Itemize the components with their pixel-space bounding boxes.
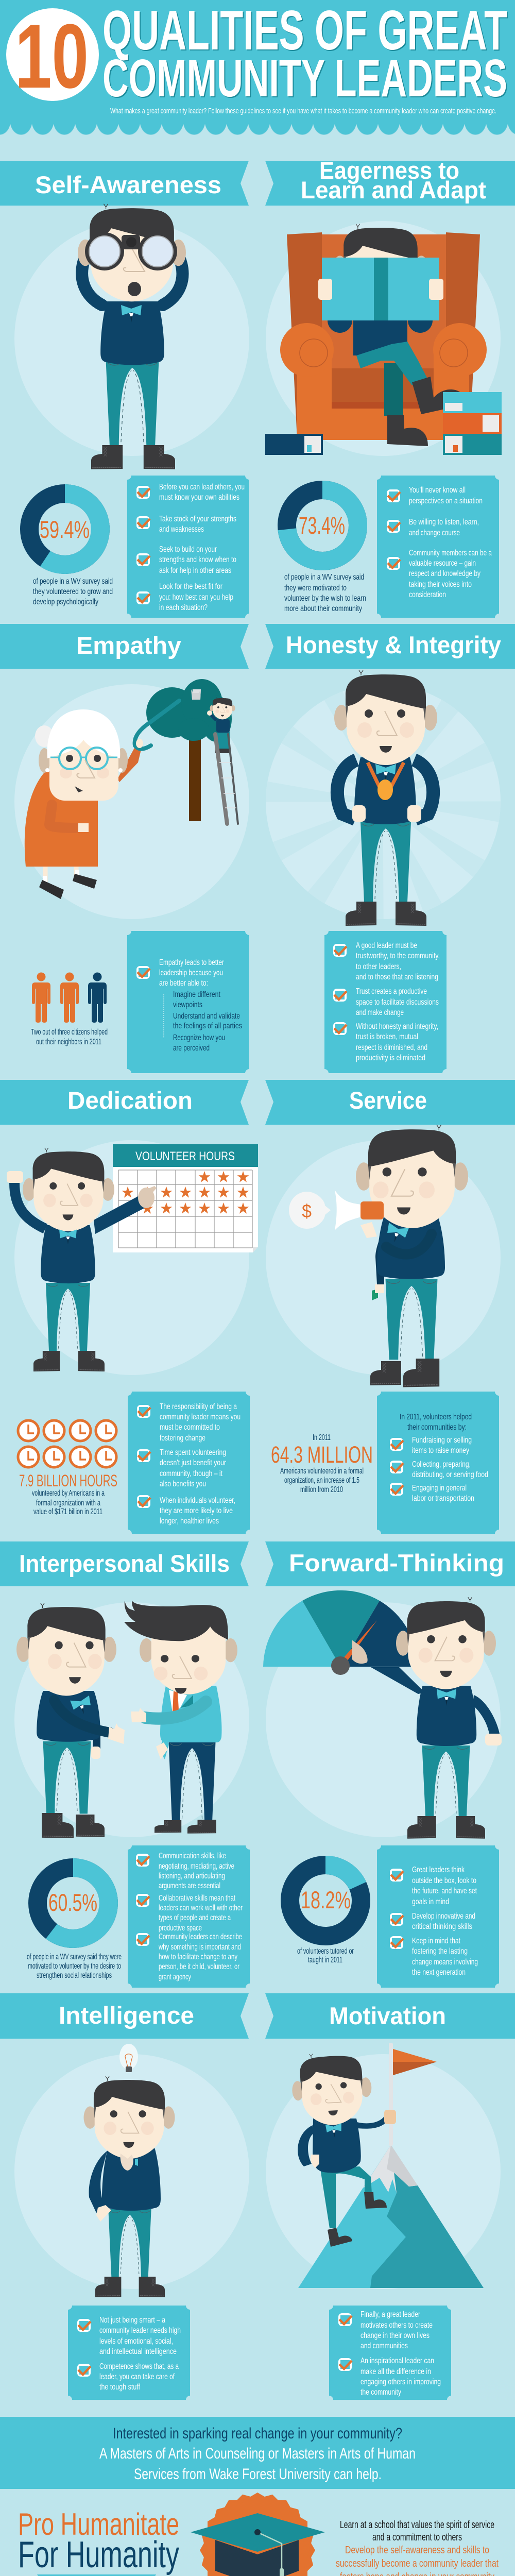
gauge with man pointing — [263, 1590, 502, 1839]
panel: intelligence checklist: the tough stuff — [99, 2383, 140, 2392]
panel: self-awareness checklist: Seek to build on your — [159, 545, 217, 554]
motto: Pro Humanitate For Humanity: For Humanity — [18, 2534, 179, 2575]
stat: 18.2% donut: of volunteers tutored or — [297, 1947, 354, 1956]
panel: honesty checklist: A good leader must be — [356, 941, 417, 950]
panel: interpersonal skills checklist: arguments are essential — [159, 1882, 220, 1890]
panel: honesty checklist: Trust creates a productive — [356, 987, 427, 996]
panel: empathy checklist: are better able to: — [159, 979, 208, 988]
backdrop circles — [14, 221, 501, 2289]
scalloped edge shadow — [0, 124, 515, 137]
panel: dedication checklist: fostering change — [160, 1434, 205, 1443]
panel: service checklist — [377, 1392, 499, 1534]
banner: Forward-Thinking: Forward-Thinking — [289, 1549, 504, 1577]
character: man reading in armchair — [265, 224, 502, 455]
call to action band — [0, 2417, 515, 2489]
call to action band: Services from Wake Forest University can help. — [134, 2466, 382, 2483]
stat: 73.4% donut: more about their community — [284, 604, 362, 613]
panel: empathy checklist: Understand and validate — [173, 1012, 240, 1021]
banner: Motivation: Motivation — [329, 2002, 446, 2029]
title — [102, 0, 507, 108]
panel: eagerness checklist: consideration — [409, 590, 446, 599]
scalloped edge — [0, 124, 515, 136]
panel: honesty checklist: trustworthy, to the community, — [356, 952, 440, 960]
panel: service checklist: Fundraising or selling — [412, 1436, 472, 1445]
panel: intelligence checklist — [68, 2306, 190, 2400]
panel: eagerness checklist: respect and knowledge by — [409, 569, 480, 578]
panel: empathy checklist: are perceived — [173, 1044, 210, 1053]
panel: interpersonal skills checklist: types of people and create a — [159, 1913, 231, 1922]
panel: forward-thinking checklist — [377, 1845, 499, 1988]
panel: forward-thinking checklist: critical thinking skills — [412, 1922, 472, 1931]
panel: dedication checklist: community, though – it — [160, 1469, 222, 1478]
panel: forward-thinking checklist: change means involving — [412, 1958, 478, 1967]
panel: intelligence checklist: and intellectual intelligence — [99, 2347, 177, 2356]
panel: eagerness checklist: taking their voices into — [409, 580, 472, 589]
panel: empathy checklist: leadership because you — [159, 969, 223, 977]
panel: interpersonal skills checklist: productive space — [159, 1924, 202, 1933]
panel: self-awareness checklist: must know your own abilities — [159, 493, 239, 502]
panel: eagerness checklist: perspectives on a situation — [409, 497, 483, 505]
panel: forward-thinking checklist: Develop innovative and — [412, 1912, 475, 1921]
banner: Intelligence: Intelligence — [59, 2002, 194, 2029]
panel: self-awareness checklist: you: how best can you help — [159, 593, 233, 602]
banner: Service — [265, 1080, 515, 1125]
panel: dedication checklist: doesn't just benefit your — [160, 1459, 227, 1467]
panel: service checklist: Engaging in general — [412, 1484, 467, 1493]
illustration: mountain with flag — [298, 2043, 484, 2288]
stat: 60.5% donut: 60.5% — [48, 1889, 97, 1916]
stat: 59.4% donut: develop psychologically — [33, 598, 98, 606]
panel: interpersonal skills checklist: listening, and articulating — [159, 1872, 225, 1880]
panel: motivation checklist: motivates others to create — [360, 2321, 433, 2330]
icon: graduation cap badge — [181, 2474, 334, 2576]
gauge: dial — [263, 1590, 412, 1675]
panel: eagerness checklist — [377, 476, 499, 618]
banner: Honesty & Integrity: Honesty & Integrity — [286, 631, 501, 658]
banner: Empathy — [0, 624, 249, 669]
panel: intelligence checklist: Competence shows that, as a — [99, 2362, 179, 2371]
panel: eagerness checklist: Be willing to listen, learn, — [409, 518, 479, 527]
panel: motivation checklist: engaging others in improving — [360, 2378, 441, 2386]
banner: Motivation — [265, 1993, 515, 2039]
character: man shaking hands, right — [124, 1601, 237, 1834]
text: school values — [336, 2519, 499, 2576]
panel: empathy checklist — [127, 931, 249, 1073]
stat: 18.2% donut — [290, 1865, 361, 1964]
panel: honesty checklist: respect is diminished, and — [356, 1043, 427, 1052]
character: man pointing at gauge — [352, 1597, 502, 1839]
panel: dedication checklist: community leader means you — [160, 1413, 241, 1421]
stat: 64.3 million: 64.3 MILLION — [271, 1442, 373, 1468]
panel: service checklist: their communities by: — [407, 1423, 467, 1432]
stat: 60.5% donut: motivated to volunteer by the desire to — [28, 1962, 121, 1971]
panel: forward-thinking checklist: fostering the lasting — [412, 1947, 468, 1956]
stat: 59.4% donut: 59.4% — [40, 516, 90, 543]
character: man with binoculars — [78, 204, 186, 469]
sunburst rays — [324, 743, 442, 860]
banner: Dedication — [0, 1080, 249, 1125]
header — [0, 0, 515, 137]
calendar: volunteer hours — [113, 1144, 258, 1252]
panel: motivation checklist: change in their own lives — [360, 2331, 430, 2340]
banner: Intelligence — [0, 1993, 249, 2039]
character: man with megaphone — [289, 1125, 468, 1387]
panel: honesty checklist — [324, 931, 447, 1073]
panel: motivation checklist: make all the difference in — [360, 2367, 431, 2376]
stat: 73.4% donut — [284, 490, 366, 613]
stat: 73.4% donut: 73.4% — [299, 512, 345, 539]
panel: motivation checklist — [329, 2306, 451, 2400]
panel: self-awareness checklist: Take stock of your strengths — [159, 515, 236, 523]
stat: 59.4% donut: of people in a WV survey said — [33, 577, 113, 586]
panel: honesty checklist: trust is broken, mutual — [356, 1032, 418, 1041]
banner: Dedication: Dedication — [67, 1087, 193, 1114]
stat: 73.4% donut: they were motivated to — [284, 584, 347, 592]
motto: Pro Humanitate For Humanity — [18, 2507, 179, 2576]
badge: number 10: 10 — [15, 5, 89, 107]
panel: motivation checklist: the community — [360, 2388, 401, 2397]
stat: two out of three citizens: out their neighbors in 2011 — [36, 1038, 101, 1046]
panel: honesty checklist: Without honesty and integrity, — [356, 1022, 438, 1031]
stat: 7.9 billion hours: 7.9 BILLION HOURS — [19, 1471, 117, 1490]
stat: 59.4% donut: they volunteered to grow and — [33, 587, 113, 596]
character: man shaking hands, left — [16, 1603, 125, 1838]
stat: 64.3 million — [271, 1433, 373, 1494]
panel: forward-thinking checklist: Great leaders think — [412, 1866, 465, 1874]
panel: dedication checklist: longer, healthier lives — [160, 1517, 219, 1526]
panel: self-awareness checklist: and weaknesses — [159, 525, 204, 534]
panel: interpersonal skills checklist: Collaborative skills mean that — [159, 1894, 235, 1903]
banner: Interpersonal Skills — [0, 1541, 249, 1586]
stat: 59.4% donut — [29, 494, 113, 606]
panel: service checklist: distributing, or serving food — [412, 1470, 488, 1479]
panel: dedication checklist — [128, 1392, 250, 1534]
banner: Forward-Thinking — [265, 1541, 515, 1586]
header band — [0, 0, 515, 124]
panel: dedication checklist: also benefits you — [160, 1480, 206, 1488]
panel: service checklist: items to raise money — [412, 1446, 469, 1455]
stat: 7.9 billion hours: value of $171 billion in 2011 — [33, 1507, 102, 1516]
stat: 60.5% donut: of people in a WV survey said they were — [27, 1953, 122, 1961]
banner: Honesty & Integrity — [265, 624, 515, 669]
banner: Eagerness to Learn and Adapt: Learn and Adapt — [301, 176, 486, 204]
panel: interpersonal skills checklist: grant agency — [159, 1973, 191, 1981]
panel: interpersonal skills checklist: Community leaders can describe — [159, 1933, 242, 1941]
panel: empathy checklist: viewpoints — [173, 1001, 202, 1009]
panel: honesty checklist: and to those that are listening — [356, 973, 438, 981]
panel: dedication checklist: they are more likely to live — [160, 1506, 233, 1515]
panel: motivation checklist: Finally, a great leader — [360, 2310, 421, 2319]
banner: Service: Service — [349, 1087, 427, 1114]
stat: 73.4% donut: volunteer by the wish to learn — [284, 594, 366, 603]
character: grandmother with cane — [25, 701, 179, 899]
panel: honesty checklist: to other leaders, — [356, 962, 401, 971]
panel: self-awareness checklist: Look for the best fit for — [159, 582, 223, 591]
panel: service checklist: In 2011, volunteers helped — [400, 1413, 472, 1421]
panel: self-awareness checklist: strengths and know when to — [159, 555, 236, 564]
stat: 60.5% donut — [27, 1868, 122, 1980]
panel: interpersonal skills checklist — [128, 1845, 250, 1988]
panel: honesty checklist: space to facilitate discussions — [356, 998, 439, 1007]
panel: intelligence checklist: community leader needs high — [99, 2326, 181, 2335]
stat: 64.3 million: Americans volunteered in a formal — [280, 1467, 364, 1476]
character: man with megaphone: $ — [302, 1200, 312, 1222]
panel: intelligence checklist: Not just being smart – a — [99, 2316, 165, 2325]
panel: interpersonal skills checklist: negotiating, mediating, active — [159, 1862, 234, 1871]
panel: honesty checklist: and make change — [356, 1008, 404, 1017]
panel: forward-thinking checklist: Keep in mind that — [412, 1937, 460, 1945]
panel: eagerness checklist: You'll never know all — [409, 486, 466, 495]
stat: 7.9 billion hours: formal organization with a — [36, 1499, 100, 1507]
panel: honesty checklist: productivity is eliminated — [356, 1054, 425, 1062]
stat: 64.3 million: organization, an increase of 1.5 — [284, 1476, 359, 1485]
icon: light bulb — [119, 2044, 138, 2072]
call to action band: A Masters of Arts in Counseling or Masters in Arts of Human — [99, 2445, 416, 2462]
panel: forward-thinking checklist: goals in mind — [412, 1897, 449, 1906]
motto ribbon — [37, 2574, 156, 2576]
panel: empathy checklist: Recognize how you — [173, 1033, 225, 1042]
panel: self-awareness checklist: in each situation? — [159, 603, 208, 612]
panel: intelligence checklist: leader, you can take care of — [99, 2372, 175, 2381]
character: thinking man — [83, 2076, 175, 2297]
panel: forward-thinking checklist: the future, and have set — [412, 1887, 477, 1895]
panel: self-awareness checklist: Before you can lead others, you — [159, 483, 245, 492]
panel: dedication checklist: Time spent volunteering — [160, 1448, 226, 1457]
calendar: volunteer hours: VOLUNTEER HOURS — [135, 1149, 235, 1163]
stat: two out of three citizens — [31, 973, 108, 1046]
panel: interpersonal skills checklist: why something is important and — [158, 1943, 241, 1952]
panel: service checklist: labor or transportation — [412, 1494, 474, 1503]
stat: 18.2% donut: 18.2% — [301, 1886, 351, 1913]
banner: Self-Awareness: Self-Awareness — [35, 171, 221, 198]
stat: two out of three citizens: Two out of three citizens helped — [31, 1028, 108, 1037]
panel: empathy checklist: Imagine different — [173, 990, 220, 999]
panel: dedication checklist: The responsibility of being a — [160, 1402, 237, 1411]
character: man climbing — [290, 2051, 396, 2247]
panel: forward-thinking checklist: the next generation — [412, 1968, 466, 1977]
stat: 18.2% donut: taught in 2011 — [308, 1956, 342, 1964]
panel: service checklist: Collecting, preparing, — [412, 1460, 471, 1469]
text: school values: and a commitment to others — [372, 2532, 462, 2543]
stat: 60.5% donut: strengthen social relationships — [37, 1971, 112, 1980]
banner: Interpersonal Skills: Interpersonal Skills — [19, 1550, 230, 1577]
banner: Eagerness to Learn and Adapt: Eagerness to — [319, 157, 459, 184]
panel: eagerness checklist: valuable resource – gain — [409, 559, 476, 568]
panel: intelligence checklist: levels of emotional, social, — [99, 2337, 173, 2346]
panel: dedication checklist: When individuals volunteer, — [160, 1496, 235, 1505]
panel: interpersonal skills checklist: Communication skills, like — [159, 1852, 226, 1860]
banner: Eagerness to Learn and Adapt — [265, 157, 515, 206]
stat: 73.4% donut: of people in a WV survey said — [284, 573, 364, 582]
panel: self-awareness checklist — [127, 476, 249, 618]
stat: 64.3 million: million from 2010 — [300, 1485, 343, 1494]
panel: interpersonal skills checklist: person, be it child, volunteer, or — [159, 1962, 239, 1971]
panel: motivation checklist: An inspirational leader can — [360, 2357, 434, 2365]
panel: motivation checklist: and communities — [360, 2342, 408, 2350]
banner: Self-Awareness — [0, 161, 249, 206]
call to action band: Interested in sparking real change in your community? — [113, 2425, 402, 2442]
panel: forward-thinking checklist: outside the box, look to — [412, 1876, 476, 1885]
panel: dedication checklist: must be committed to — [160, 1423, 220, 1432]
stat: 64.3 million: In 2011 — [313, 1433, 331, 1442]
stat: 7.9 billion hours: volunteered by Americans in a — [32, 1489, 105, 1498]
panel: eagerness checklist: and change course — [409, 529, 460, 537]
illustration: tree, ladder, cat and small man — [146, 679, 238, 824]
panel: interpersonal skills checklist: leaders can work well with other — [159, 1904, 243, 1912]
character: man with medal — [334, 670, 437, 926]
panel: empathy checklist: the feelings of all parties — [173, 1022, 242, 1030]
stat: 7.9 billion hours — [18, 1420, 117, 1516]
panel: empathy checklist: Empathy leads to better — [159, 958, 225, 967]
panel: interpersonal skills checklist: how to facilitate change to any — [159, 1953, 237, 1961]
banner: Empathy: Empathy — [76, 632, 181, 659]
character: man pointing at calendar — [7, 1148, 157, 1371]
motto: Pro Humanitate For Humanity: Pro Humanitate — [18, 2507, 179, 2541]
panel: self-awareness checklist: ask for help in other areas — [159, 566, 231, 575]
